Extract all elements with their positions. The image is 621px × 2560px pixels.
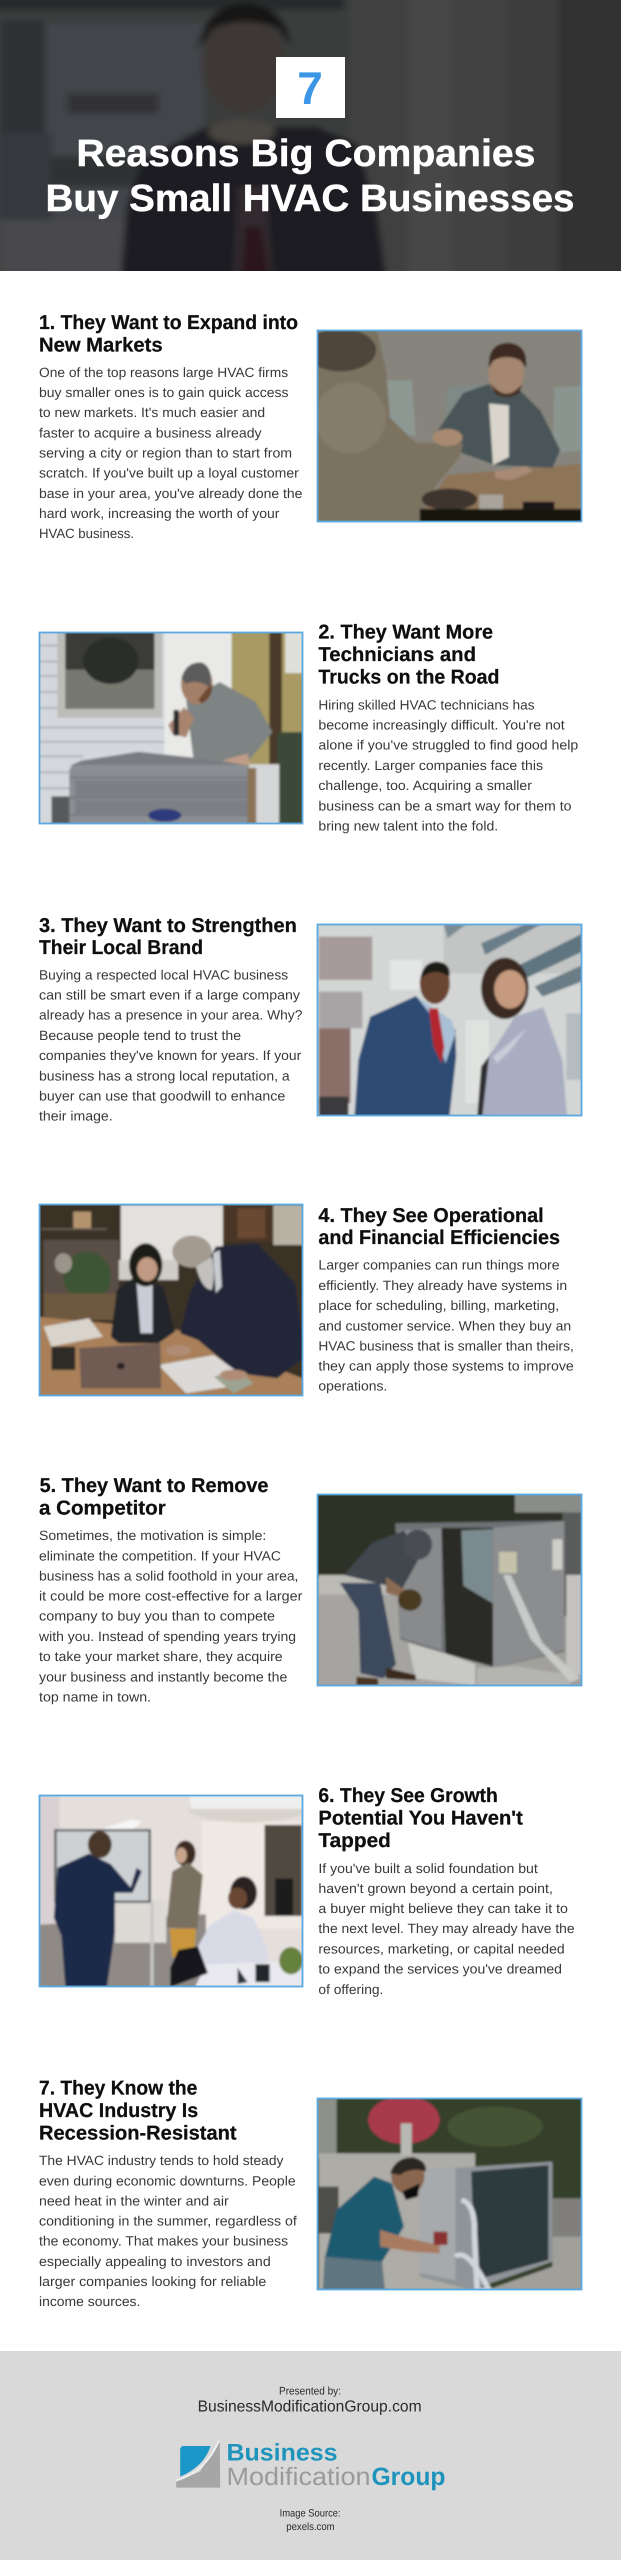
image source credit: pexels.com (286, 2521, 335, 2533)
panel: reason 1 (39, 312, 586, 541)
body text 1: buy smaller ones is to gain quick access (39, 385, 289, 400)
image source credit (280, 2508, 341, 2533)
heading 3: Their Local Brand (39, 937, 203, 959)
heading 1: New Markets (39, 334, 163, 356)
body text 4: efficiently. They already have systems in (318, 1278, 567, 1293)
header background photo (0, 0, 621, 271)
photo: technician with gauges at condenser (313, 2095, 586, 2293)
heading 2: 2. They Want More (318, 622, 493, 644)
body text 5: business has a solid foothold in your area, (39, 1568, 298, 1583)
body text 2: Hiring skilled HVAC technicians has (318, 697, 535, 712)
body text 5 (38, 1528, 303, 1704)
heading 7: 7. They Know the (39, 2078, 197, 2100)
title: Reasons Big Companies (76, 133, 535, 175)
footer panel (0, 2351, 621, 2560)
heading 5: a Competitor (39, 1497, 166, 1519)
heading 4 (318, 1205, 560, 1249)
heading 5: 5. They Want to Remove (40, 1475, 268, 1497)
body text 3: already has a presence in your area. Why? (39, 1008, 302, 1023)
body text 2: alone if you've struggled to find good help (318, 738, 578, 753)
heading 6: Potential You Haven't (318, 1808, 523, 1830)
heading 6 (318, 1785, 523, 1852)
photo: team at whiteboard (36, 1793, 307, 1989)
logo (176, 2440, 445, 2491)
body text 5: Sometimes, the motivation is simple: (39, 1528, 266, 1543)
logo wordmark: Modification (226, 2463, 370, 2491)
body text 4: HVAC business that is smaller than theirs, (318, 1338, 574, 1353)
title (46, 133, 574, 220)
panel: reason 3 (39, 915, 586, 1124)
body text 6: haven't grown beyond a certain point, (318, 1881, 553, 1896)
body text 2: challenge, too. Acquiring a smaller (318, 778, 532, 793)
body text 5: top name in town. (39, 1689, 151, 1704)
body text 6: a buyer might believe they can take it to (318, 1901, 568, 1916)
presented by credit: BusinessModificationGroup.com (198, 2399, 422, 2416)
body text 7 (39, 2153, 297, 2309)
body text 4: operations. (318, 1379, 387, 1394)
body text 7: need heat in the winter and air (39, 2193, 229, 2208)
photo: two business people (313, 920, 586, 1120)
body text 5: company to buy you than to compete (39, 1609, 275, 1624)
heading 7 (39, 2078, 237, 2144)
title: Buy Small HVAC Businesses (46, 178, 574, 220)
body text 5: to take your market share, they acquire (39, 1649, 283, 1664)
heading 2 (318, 622, 499, 689)
panel: reason 6 (36, 1785, 575, 1997)
presented by credit: Presented by: (279, 2386, 341, 2398)
body text 1 (39, 365, 302, 541)
photo: technician inspecting AC unit (36, 630, 307, 829)
body text 7: conditioning in the summer, regardless of (39, 2214, 297, 2229)
body text 3 (39, 967, 302, 1124)
logo wordmark: Group (372, 2463, 446, 2491)
body text 7: larger companies looking for reliable (39, 2274, 266, 2289)
body text 7: the economy. That makes your business (39, 2234, 288, 2249)
header banner (0, 0, 621, 271)
body text 5: your business and instantly become the (39, 1669, 287, 1684)
body text 5: with you. Instead of spending years trying (38, 1629, 296, 1644)
heading 7: Recession-Resistant (39, 2122, 237, 2144)
body text 4: Larger companies can run things more (318, 1258, 560, 1273)
presented by credit (198, 2386, 422, 2416)
heading 2: Trucks on the Road (318, 667, 499, 689)
panel: reason 2 (36, 622, 578, 833)
heading 1: 1. They Want to Expand into (39, 312, 298, 334)
body text 1: scratch. If you've built up a loyal customer (39, 466, 299, 480)
photo: colleagues reviewing documents (36, 1202, 307, 1398)
body text 1: serving a city or region than to start from (39, 446, 292, 460)
heading 3 (39, 915, 297, 959)
body text 3: can still be smart even if a large company (39, 988, 300, 1003)
body text 2 (318, 697, 578, 833)
heading 2: Technicians and (318, 644, 476, 666)
photo: handshake across table (305, 327, 586, 527)
body text 7: especially appealing to investors and (39, 2254, 271, 2269)
body text 1: to new markets. It's much easier and (39, 405, 265, 420)
body text 4: they can apply those systems to improve (318, 1359, 574, 1374)
logo wordmark: Business (226, 2440, 338, 2467)
body text 1: hard work, increasing the worth of your (39, 506, 280, 521)
panel: reason 5 (38, 1475, 586, 1704)
body text 6: If you've built a solid foundation but (318, 1861, 538, 1876)
body text 4: and customer service. When they buy an (318, 1318, 571, 1333)
body text 3: their image. (39, 1109, 113, 1124)
body text 5: eliminate the competition. If your HVAC (39, 1548, 281, 1563)
heading 3: 3. They Want to Strengthen (39, 915, 297, 937)
photo: technician servicing rooftop unit (313, 1491, 586, 1689)
panel: reason 4 (36, 1202, 574, 1398)
body text 3: Because people tend to trust the (39, 1028, 241, 1043)
body text 5: it could be more cost-effective for a larger (39, 1589, 303, 1604)
body text 7: The HVAC industry tends to hold steady (39, 2153, 284, 2168)
heading 6: Tapped (318, 1830, 391, 1852)
body text 1: One of the top reasons large HVAC firms (39, 365, 288, 380)
body text 1: faster to acquire a business already (39, 426, 262, 440)
panel: reason 7 (39, 2078, 586, 2309)
body text 3: business has a strong local reputation, a (39, 1068, 290, 1083)
heading 6: 6. They See Growth (318, 1785, 498, 1807)
heading 4: and Financial Efficiencies (318, 1227, 560, 1249)
body text 4: place for scheduling, billing, marketing, (318, 1298, 559, 1313)
body text 6: to expand the services you've dreamed (318, 1962, 562, 1977)
body text 2: business can be a smart way for them to (318, 798, 572, 813)
number box (276, 57, 345, 118)
body text 6 (318, 1861, 575, 1997)
heading 1 (39, 312, 298, 356)
footer background (0, 2351, 621, 2560)
body text 6: the next level. They may already have the (318, 1921, 575, 1936)
body text 1: base in your area, you've already done the (39, 486, 302, 501)
body text 1: HVAC business. (39, 526, 134, 541)
body text 3: Buying a respected local HVAC business (39, 967, 288, 982)
body text 2: become increasingly difficult. You're not (318, 718, 565, 733)
heading 4: 4. They See Operational (318, 1205, 544, 1227)
heading 5 (39, 1475, 268, 1519)
logo wordmark (226, 2440, 446, 2491)
heading 7: HVAC Industry Is (39, 2100, 198, 2122)
logo icon (176, 2441, 220, 2488)
image source credit: Image Source: (280, 2508, 341, 2520)
body text 2: bring new talent into the fold. (318, 818, 498, 833)
body text 7: income sources. (39, 2294, 140, 2309)
body text 7: even during economic downturns. People (39, 2173, 296, 2188)
body text 6: of offering. (318, 1982, 383, 1997)
body text 3: buyer can use that goodwill to enhance (39, 1088, 285, 1103)
body text 4 (318, 1258, 574, 1394)
body text 3: companies they've known for years. If your (39, 1048, 302, 1063)
body text 2: recently. Larger companies face this (318, 758, 543, 773)
body text 6: resources, marketing, or capital needed (318, 1942, 565, 1957)
number box: 7 (297, 62, 323, 114)
